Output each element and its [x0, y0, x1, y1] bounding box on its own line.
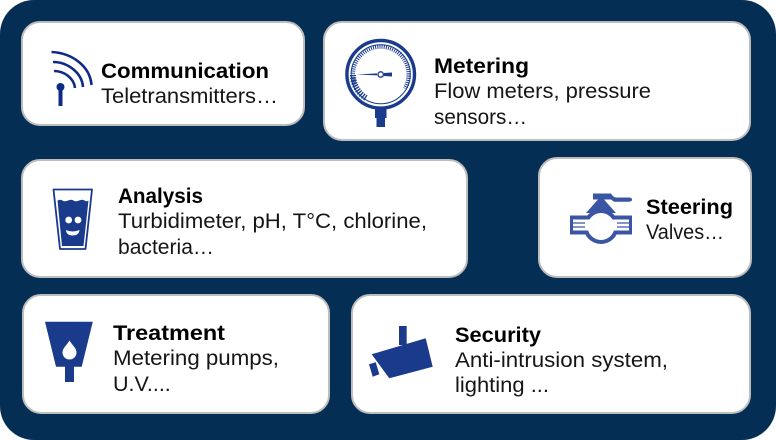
heading: metering: Metering [434, 54, 529, 78]
panel: communication [22, 22, 304, 125]
text: steering detail: Valves… [646, 220, 724, 244]
panel: security [352, 295, 750, 413]
icon: valve [570, 194, 632, 244]
heading: treatment: Treatment [113, 321, 225, 345]
text: treatment detail [113, 346, 279, 396]
icon: water glass [54, 190, 92, 249]
icon: antenna [52, 52, 92, 106]
heading: steering: Steering [646, 195, 733, 219]
panel: metering [324, 22, 750, 140]
icon: pressure gauge [347, 41, 415, 127]
heading: analysis: Analysis [118, 184, 203, 208]
text: metering detail [434, 79, 651, 129]
text: analysis detail [118, 209, 427, 259]
heading: communication: Communication [101, 59, 269, 83]
text: metering detail: sensors… [434, 105, 527, 129]
text: treatment detail: U.V.... [113, 372, 171, 396]
panel: analysis [22, 160, 467, 277]
text: communication detail: Teletransmitters… [101, 84, 278, 108]
text: analysis detail: Turbidimeter, pH, T°C, chlorine, [118, 209, 427, 233]
text: treatment detail: Metering pumps, [113, 346, 279, 370]
icon: security camera [369, 326, 433, 378]
text: security detail: lighting ... [455, 373, 549, 397]
text: security detail [455, 348, 668, 397]
text: analysis detail: bacteria… [118, 235, 214, 259]
heading: security: Security [455, 323, 541, 347]
panel: treatment [23, 295, 329, 413]
text: metering detail: Flow meters, pressure [434, 79, 651, 103]
text: security detail: Anti-intrusion system, [455, 348, 668, 372]
icon: dosing funnel with drop [45, 322, 93, 382]
panel: steering [539, 158, 751, 277]
